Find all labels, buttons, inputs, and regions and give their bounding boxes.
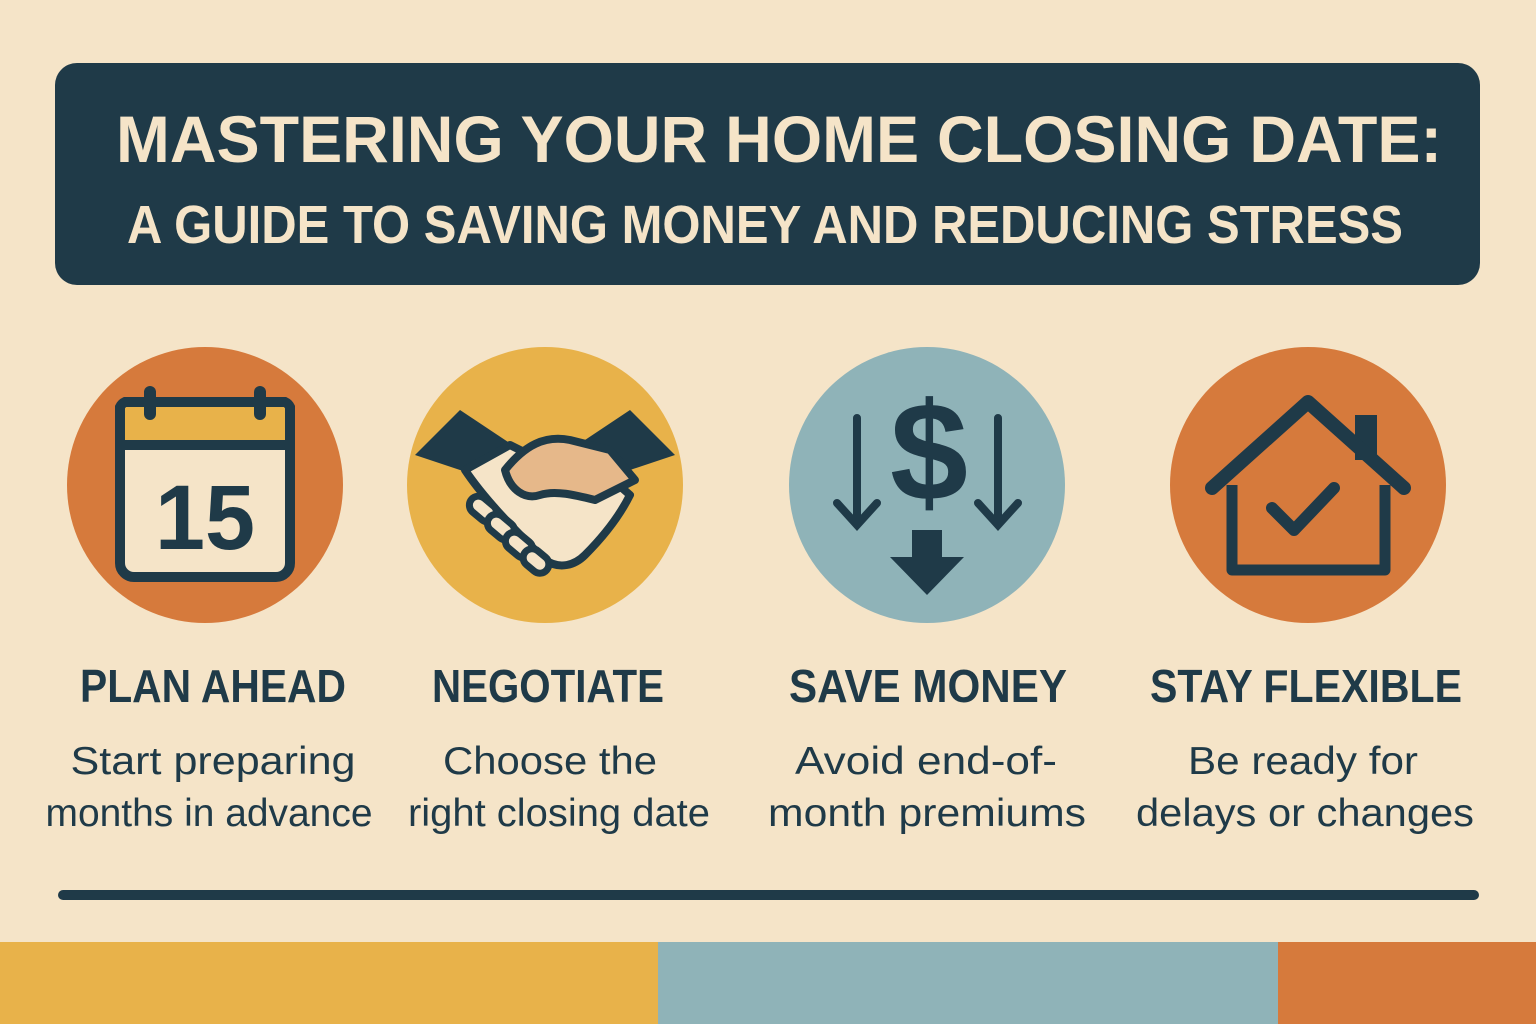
column 4 text: STAY FLEXIBLE [1150,660,1462,712]
title banner [55,63,1480,285]
column 4 text [1136,660,1474,835]
title: MASTERING YOUR HOME CLOSING DATE: [116,102,1442,176]
icon: handshake [407,347,683,623]
icon: dollar with down arrows [789,347,1065,623]
icon: house with check [1170,347,1446,623]
icon: calendar: 15 [155,467,255,569]
column 1 text: months in advance [46,792,372,835]
column 4 text: Be ready for [1188,740,1418,783]
column 3 text [768,660,1086,835]
subtitle: A GUIDE TO SAVING MONEY AND REDUCING STRESS [127,195,1403,255]
icon: dollar with down arrows: $ [890,373,968,530]
icon: calendar [67,347,343,623]
column 4 text: delays or changes [1136,792,1474,835]
column 2 text: Choose the [443,740,657,783]
column 2 text: right closing date [408,792,710,835]
column 3 text: month premiums [768,792,1086,835]
column 3 text: Avoid end-of- [795,740,1057,783]
footer color bars [0,942,1536,1024]
column 2 text: NEGOTIATE [432,660,664,712]
column 1 text [46,660,372,835]
column 3 text: SAVE MONEY [789,660,1067,712]
column 1 text: PLAN AHEAD [80,660,346,712]
column 1 text: Start preparing [70,740,356,783]
column 2 text [408,660,710,835]
